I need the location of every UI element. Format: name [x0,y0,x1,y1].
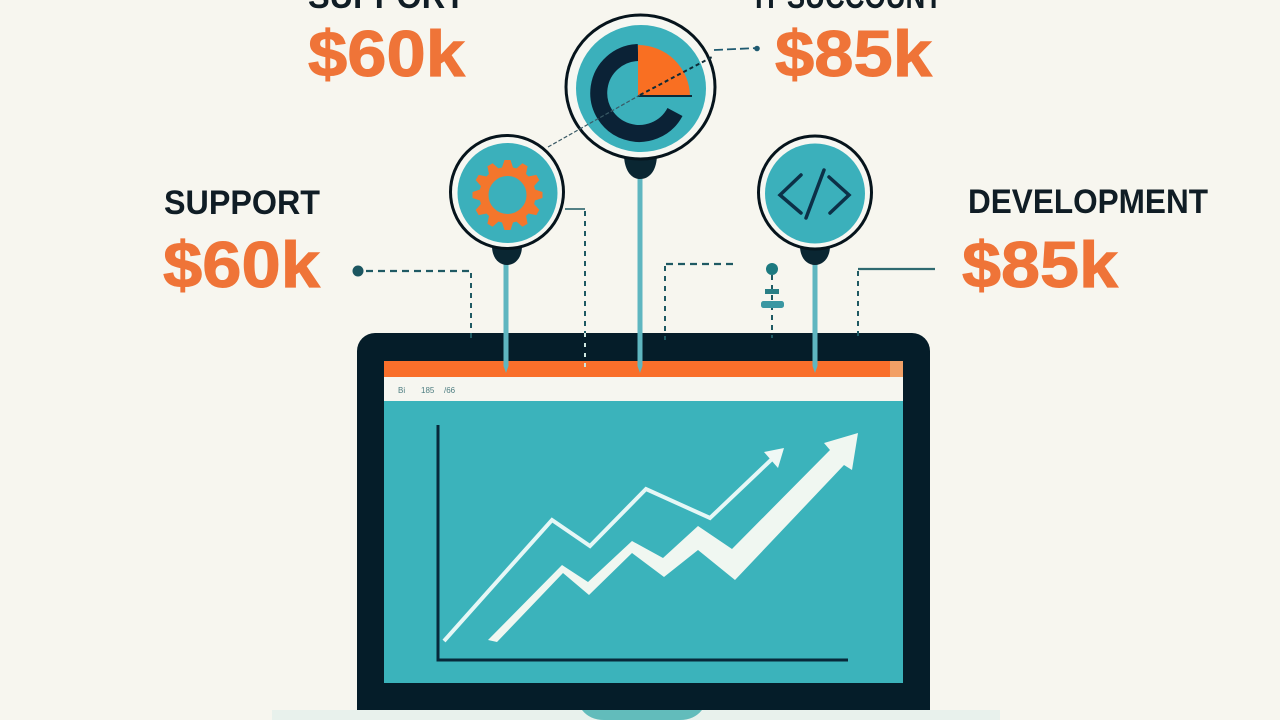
stat: support [163,184,321,301]
connector: small dot and bar [761,263,784,338]
connector: support dot to monitor [352,266,471,340]
stat: top support (clipped): $60k [308,17,466,90]
stat: top IT account (clipped) [755,0,942,90]
stat: development: $85k [962,228,1119,301]
stat: support: $60k [163,228,321,301]
screen: toolbar: Bi [398,386,405,395]
development pin stem [812,262,818,373]
icon: gear pin [450,136,564,265]
stat: top IT account (clipped): $85k [775,17,933,90]
thick trend arrow [488,433,858,642]
connector: development to monitor [858,269,935,340]
support pin stem [504,262,508,373]
screen: orange title bar [384,361,903,377]
stat: support: SUPPORT [164,184,320,222]
connector: center to monitor [665,264,733,340]
connector: gear to monitor [565,209,585,372]
center pin stem [638,176,642,373]
screen: toolbar [384,377,903,401]
monitor frame [357,333,930,710]
screen: toolbar: /66 [444,386,456,395]
stat: development: DEVELOPMENT [968,183,1208,221]
monitor stand and base [272,710,1000,720]
icon: code pin [758,136,872,265]
stat: development [962,183,1208,301]
monitor [272,333,1000,720]
screen: toolbar: 185 [421,386,435,395]
screen: chart area [384,401,903,683]
chart axes [438,425,848,660]
thin trend arrow [444,448,784,641]
icon: center pie pin [548,15,760,179]
